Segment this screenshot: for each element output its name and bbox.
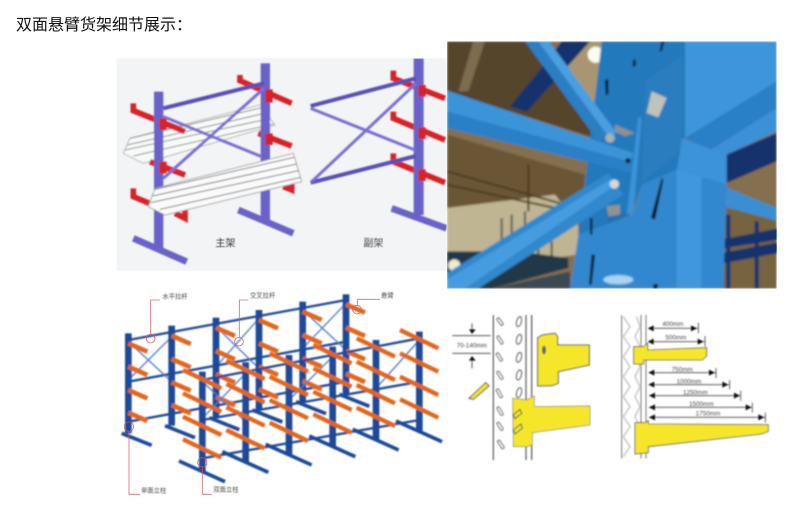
arm length labels: 400mm bbox=[662, 321, 683, 328]
callout labels: 悬臂 bbox=[381, 291, 394, 300]
label: main frame: 主架 bbox=[215, 238, 235, 250]
arm length labels: 1750mm bbox=[696, 410, 720, 417]
spacing label: 70-140mm bbox=[457, 342, 487, 349]
main frame bbox=[133, 63, 293, 262]
front row rack bbox=[179, 330, 442, 482]
callout labels bbox=[141, 291, 394, 495]
panel: main and secondary frame diagram bbox=[117, 58, 447, 271]
arm length labels: 750mm bbox=[672, 366, 693, 373]
label: secondary frame: 副架 bbox=[363, 238, 383, 250]
arm length labels: 1250mm bbox=[683, 390, 708, 397]
panel: photo of column joint bbox=[447, 41, 777, 289]
arm length labels: 500mm bbox=[665, 335, 686, 342]
arm length diagram bbox=[622, 315, 768, 458]
front pipe bundle bbox=[148, 153, 302, 215]
callout labels: 双面立柱 bbox=[213, 485, 239, 494]
callout labels: 交叉拉杆 bbox=[250, 291, 276, 300]
arm length labels: 1000mm bbox=[677, 378, 701, 385]
back pipe bundle bbox=[123, 105, 275, 163]
infographic figure area bbox=[116, 41, 777, 495]
arm length labels bbox=[662, 321, 720, 417]
callout labels: 单面立柱 bbox=[141, 486, 167, 495]
secondary frame bbox=[311, 58, 447, 228]
callouts with leader lines bbox=[124, 299, 380, 494]
panel: cantilever arm dimensions bbox=[447, 307, 777, 463]
back row rack bbox=[122, 294, 369, 445]
panel: isometric rack layout bbox=[122, 291, 442, 495]
title: 双面悬臂货架细节展示： bbox=[16, 17, 192, 34]
white background bbox=[447, 307, 777, 463]
slotted column and arm hooks bbox=[452, 315, 590, 460]
arm length labels: 1500mm bbox=[689, 401, 714, 408]
callout labels: 水平拉杆 bbox=[162, 292, 188, 301]
